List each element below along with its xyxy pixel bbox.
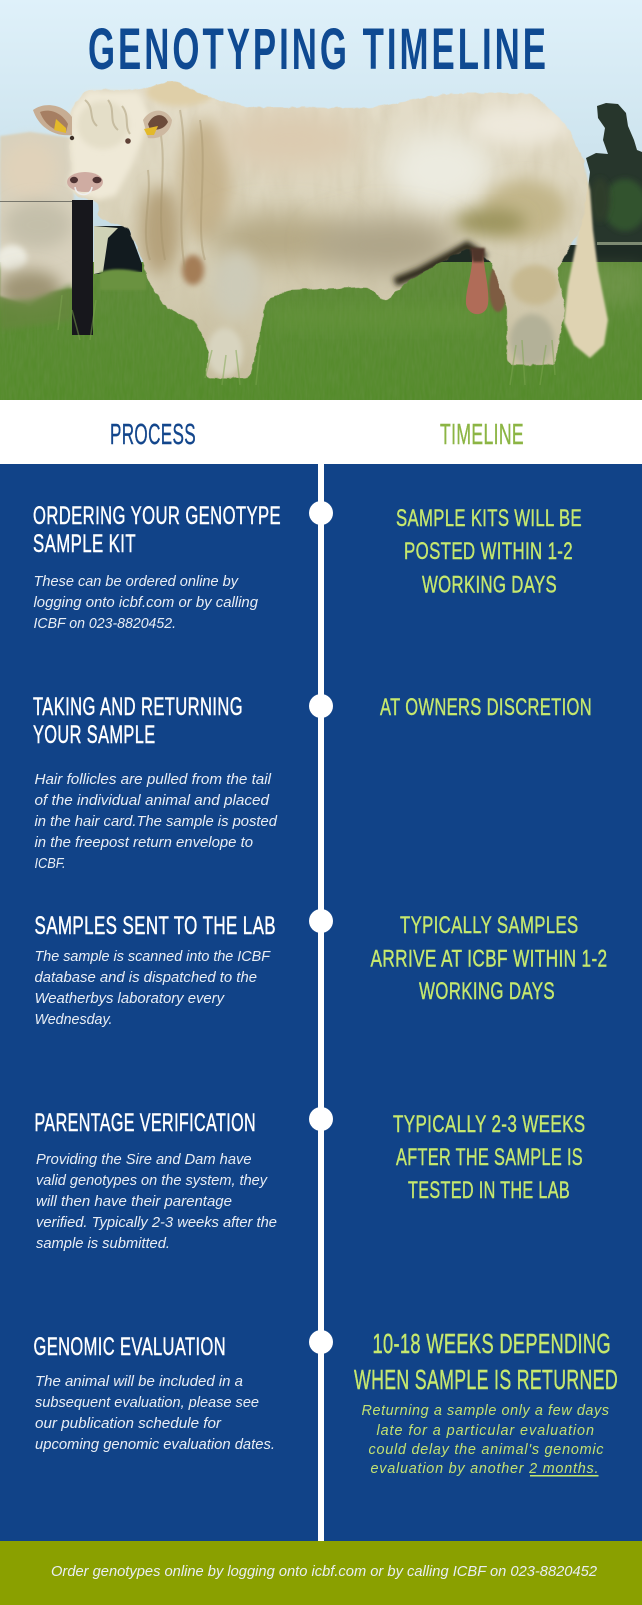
photo: Charolais bull standing in a field	[0, 0, 642, 400]
text: late return warning: late for a particular evaluation	[376, 1423, 594, 1439]
icon: distant trees on the right	[441, 103, 642, 262]
timeline spine	[309, 464, 333, 1543]
panel: footer call to action	[0, 1541, 642, 1605]
node 2	[309, 694, 333, 718]
callout: step 1 timing: POSTED WITHIN 1-2	[404, 538, 573, 565]
node 5	[309, 1330, 333, 1354]
icon: dark hedge behind the bull's neck	[94, 226, 146, 290]
icon: grass field	[0, 262, 642, 400]
panel: timeline background	[0, 464, 642, 1541]
text: step 5 description: our publication schedule for	[35, 1416, 222, 1432]
node 3	[309, 909, 333, 933]
text: step 5 description: The animal will be included in a	[35, 1374, 243, 1390]
heading: parentage verification: PARENTAGE VERIFICATION	[34, 1109, 256, 1137]
node 1	[309, 501, 333, 525]
panel: step 4 process	[34, 1109, 277, 1252]
heading: timeline: TIMELINE	[440, 419, 524, 451]
text: step 2 description: in the freepost return envelope to	[34, 835, 253, 851]
text: step 5 description: upcoming genomic evaluation dates.	[35, 1437, 275, 1453]
text: late return warning: could delay the animal's genomic	[368, 1442, 604, 1458]
heading: genomic evaluation: GENOMIC EVALUATION	[34, 1333, 226, 1361]
text: step 4 description: Providing the Sire and Dam have	[36, 1152, 252, 1168]
text: step 5 description: subsequent evaluation, please see	[35, 1395, 259, 1411]
panel: step 5 process	[34, 1333, 275, 1453]
text: late return warning: evaluation by another 2 months.	[370, 1461, 598, 1477]
heading: taking and returning your sample: YOUR SAMPLE	[33, 721, 156, 749]
callout: step 3 timing: WORKING DAYS	[419, 978, 555, 1005]
heading: step 5 duration	[354, 1328, 618, 1395]
text: step 1 description: These can be ordered online by	[34, 574, 240, 590]
heading: ordering your genotype sample kit	[33, 502, 281, 558]
text: step 4 description	[36, 1152, 277, 1252]
text: step 2 description: of the individual animal and placed	[34, 793, 270, 809]
text: step 2 description: Hair follicles are pulled from the tail	[34, 772, 272, 788]
text: step 2 description	[34, 772, 278, 872]
icon: bull body	[69, 81, 587, 380]
text: step 4 description: verified. Typically 2-3 weeks after the	[36, 1215, 277, 1231]
heading: ordering your genotype sample kit: SAMPLE KIT	[33, 530, 136, 558]
heading: taking and returning your sample: TAKING AND RETURNING	[33, 693, 243, 721]
icon: bull's right ear with tag	[143, 111, 172, 138]
panel: step 3 process	[34, 912, 276, 1028]
callout: step 4 timing	[393, 1111, 586, 1204]
heading: samples sent to the lab: SAMPLES SENT TO THE LAB	[34, 912, 276, 940]
panel: step 1 process	[33, 502, 281, 632]
icon: bull's tail	[564, 165, 608, 358]
text: step 3 description: Weatherbys laboratory every	[34, 991, 226, 1007]
text: footer ordering details: Order genotypes online by logging onto icbf.com or by calling ICBF on 023-8820452	[51, 1564, 597, 1580]
callout: step 1 timing	[396, 505, 582, 598]
text: late return warning: Returning a sample only a few days	[362, 1403, 609, 1419]
icon: bull's far hind leg	[489, 264, 507, 312]
text: step 3 description: The sample is scanned into the ICBF	[34, 949, 271, 965]
text: step 3 description	[34, 949, 271, 1028]
heading: ordering your genotype sample kit: ORDERING YOUR GENOTYPE	[33, 502, 281, 530]
icon: bull's curly white face	[68, 92, 150, 200]
text: late return warning	[362, 1403, 609, 1477]
icon: grass blades over hooves	[58, 295, 555, 385]
callout: step 1 timing: WORKING DAYS	[422, 572, 557, 598]
text: step 4 description: will then have their parentage	[36, 1194, 232, 1210]
heading: taking and returning your sample	[33, 693, 243, 749]
node 4	[309, 1107, 333, 1131]
icon: bull's muzzle and nose ring	[67, 136, 131, 194]
text: step 3 description: Wednesday.	[34, 1012, 112, 1028]
text: step 2 description: ICBF.	[34, 856, 66, 872]
panel: step 2 process	[33, 693, 278, 872]
heading: process: PROCESS	[110, 419, 196, 451]
callout: step 5 timing	[354, 1328, 618, 1477]
icon: second cow on the left	[0, 132, 74, 330]
icon: bull's left ear with tag	[33, 105, 72, 135]
text: step 4 description: valid genotypes on the system, they	[36, 1173, 269, 1189]
text: step 1 description: ICBF on 023-8820452.	[34, 616, 176, 632]
text: step 1 description	[34, 574, 258, 632]
text: step 1 description: logging onto icbf.com or by calling	[34, 595, 258, 611]
icon: scrotum	[466, 248, 488, 314]
text: step 2 description: in the hair card.The sample is posted	[34, 814, 278, 830]
icon: fence post and wire	[0, 200, 93, 335]
text: step 5 description	[35, 1374, 275, 1453]
panel: column header band	[0, 400, 642, 464]
text: step 4 description: sample is submitted.	[36, 1236, 170, 1252]
text: step 3 description: database and is dispatched to the	[34, 970, 257, 986]
callout: step 3 timing	[370, 912, 608, 1005]
